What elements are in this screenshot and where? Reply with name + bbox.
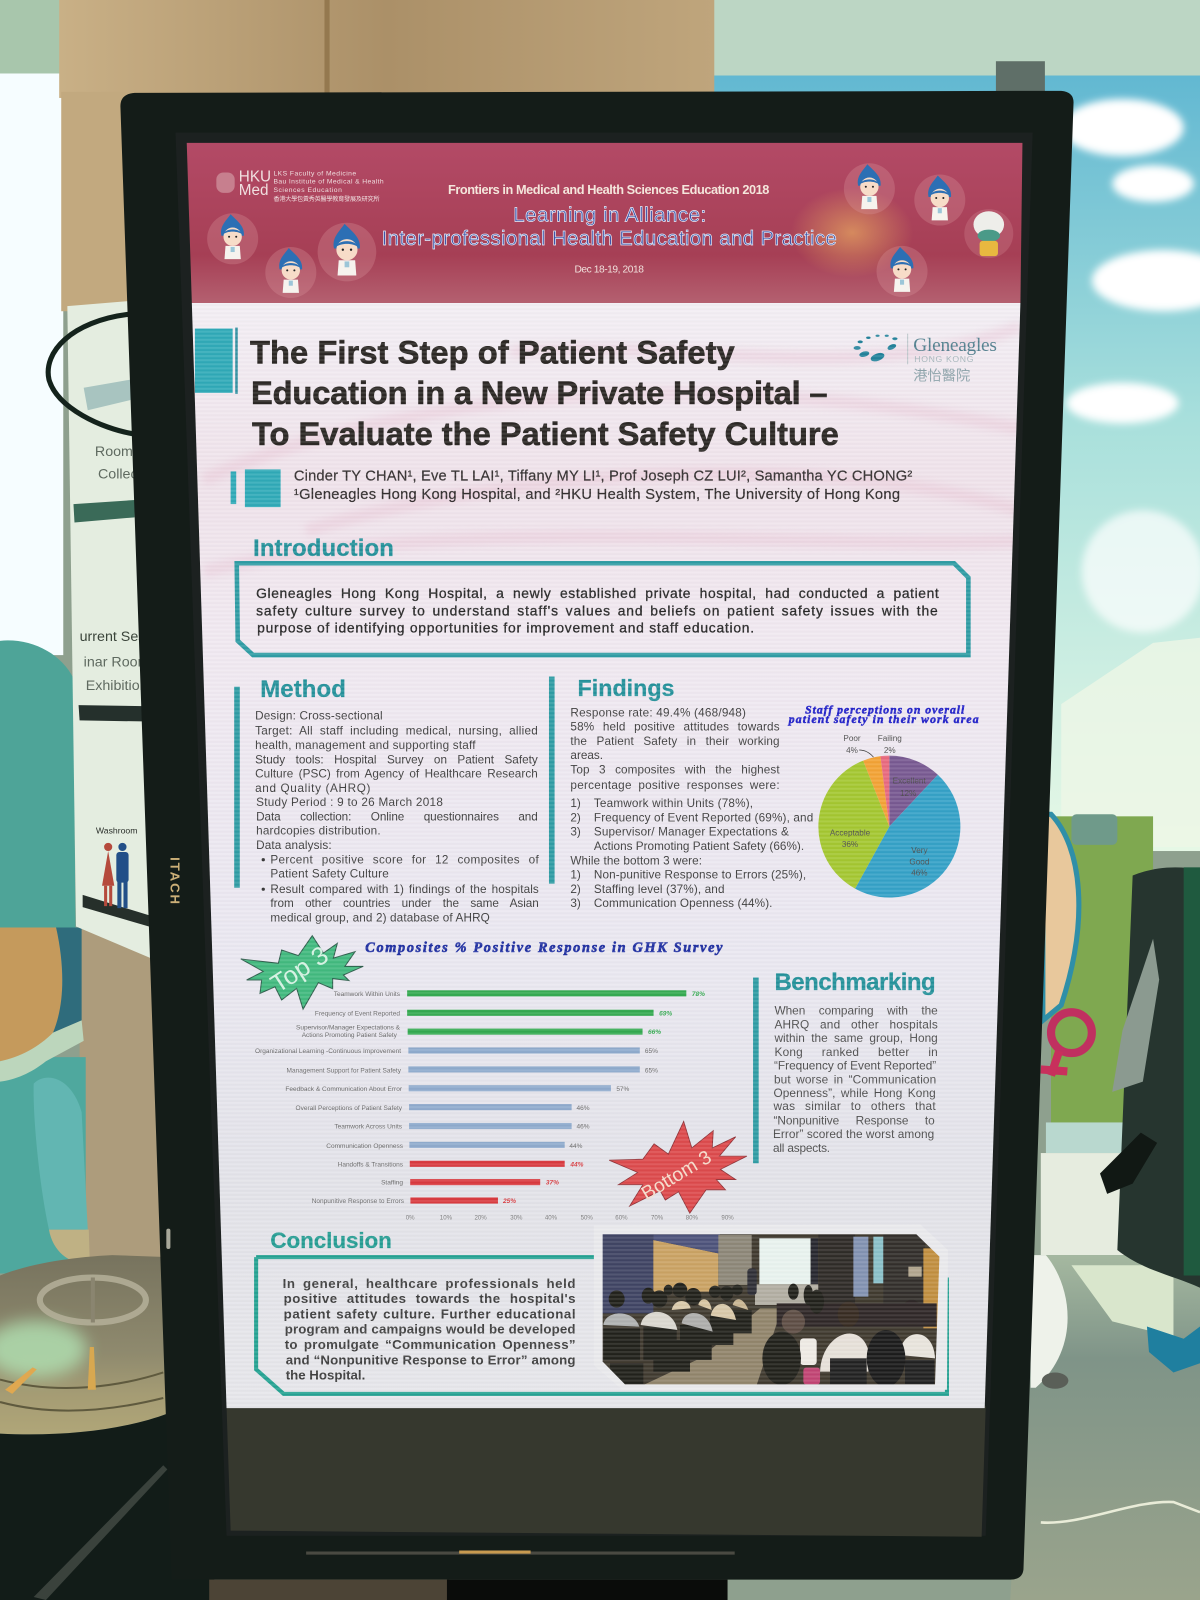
cable — [1041, 1502, 1200, 1523]
method text: Percent positive score for 12 composites of — [270, 853, 540, 866]
findings text: 3) — [570, 826, 581, 839]
left mascot dark band — [53, 928, 82, 1033]
HKU Med logo: 香港大學包黃秀英醫學教育發展及研究所 — [273, 195, 380, 203]
sign strip dark one — [73, 500, 135, 522]
value labels: 66% — [648, 1029, 661, 1036]
bars middle — [408, 1047, 640, 1148]
conference name: Frontiers in Medical and Health Sciences Education 2018 — [448, 182, 769, 197]
white round base — [1031, 1255, 1068, 1388]
curtains — [653, 1240, 718, 1292]
slice: Failing 2% — [880, 756, 889, 827]
pie chart: staff perceptions — [788, 703, 979, 898]
callout: Top 3 — [241, 936, 363, 1009]
pie labels: Failing — [878, 734, 902, 743]
pie labels: 4% — [846, 746, 858, 755]
findings text: 3) — [570, 897, 581, 910]
screen texture — [192, 303, 1020, 1408]
method text: Target: All staff including medical, nursing, allied — [255, 725, 538, 738]
benchmarking text: Kong ranked better in — [774, 1045, 938, 1059]
pie labels: Very — [911, 846, 928, 855]
bars top 3 — [407, 990, 686, 1035]
panel: introduction: purpose of identifying opportunities for improvement and staff education. — [257, 620, 754, 636]
header banner — [187, 143, 1022, 303]
category labels: Staffing — [381, 1180, 403, 1187]
pie labels: 12% — [900, 789, 916, 798]
category labels: Organizational Learning -Continuous Improvement — [255, 1048, 401, 1055]
method text: Result compared with 1) findings of the hospitals — [270, 883, 539, 896]
benchmarking text: Openness”, while Hong Kong — [773, 1086, 936, 1100]
presenter — [747, 1268, 757, 1295]
sign text fragments: Exhibition Area — [86, 678, 181, 694]
method text: Study tools: Hospital Survey on Patient Safety — [255, 753, 538, 766]
panel: findings — [549, 675, 813, 910]
findings text: percentage positive responses were: — [570, 779, 780, 792]
category labels: Teamwork Within Units — [334, 991, 401, 998]
pillar lower — [80, 918, 171, 1265]
x axis: 20% — [474, 1214, 487, 1221]
bar chart title: Composites % Positive Response in GHK Survey — [365, 940, 723, 956]
banner glow — [791, 188, 913, 278]
callout: Bottom 3 — [609, 1121, 747, 1213]
panel: conclusion: program and campaigns would be developed — [285, 1322, 576, 1337]
poster pink waves — [204, 327, 1020, 571]
icon: female and male washroom figures — [102, 843, 129, 908]
callout: Top 3: Top 3 — [266, 941, 334, 999]
benchmarking text: “Nonpunitive Response to — [773, 1113, 935, 1127]
sign strip dark two — [79, 705, 143, 721]
HKU Med logo: HKU — [239, 169, 271, 186]
value labels: 44% — [569, 1161, 584, 1168]
poster title: The First Step of Patient Safety — [250, 333, 735, 370]
findings text: Frequency of Event Reported (69%), and — [594, 811, 813, 824]
x axis: 10% — [440, 1214, 453, 1221]
panel: conclusion: positive attitudes towards the hospital's — [284, 1291, 576, 1306]
sign text fragments — [80, 444, 181, 836]
category labels: Supervisor/Manager Expectations & — [296, 1025, 401, 1032]
x axis: 80% — [686, 1214, 699, 1221]
author accent blocks — [231, 469, 281, 507]
pie labels — [830, 734, 930, 878]
panel: conclusion: and “Nonpunitive Response to Error” among — [286, 1352, 576, 1367]
left mascot face — [0, 928, 62, 1061]
distant building — [1061, 638, 1200, 847]
pie labels: Poor — [843, 734, 861, 743]
findings text: While the bottom 3 were: — [570, 854, 702, 867]
dark floor left — [0, 1413, 214, 1600]
panel: conclusion: the Hospital. — [286, 1368, 365, 1383]
left teal mascot head — [0, 640, 76, 931]
pie chart title — [788, 703, 979, 726]
panel: conclusion: patient safety culture. Further educational — [284, 1306, 576, 1321]
photo: seminar audience — [594, 1224, 948, 1390]
category labels: Actions Promoting Patient Safety — [302, 1032, 398, 1039]
sign text fragments: Room S-7 — [95, 444, 159, 460]
benchmarking text — [772, 1003, 938, 1155]
conference theme: Learning in Alliance: — [513, 204, 706, 226]
slice: Excellent 12% — [889, 756, 938, 827]
benchmarking text: but worse in “Communication — [774, 1073, 936, 1087]
x axis: 40% — [545, 1214, 558, 1221]
value labels: 78% — [692, 991, 705, 998]
category labels: Handoffs & Transitions — [338, 1161, 404, 1168]
upper wall left — [0, 0, 61, 73]
benchmarking text: all aspects. — [773, 1141, 830, 1155]
x axis: 0% — [406, 1214, 415, 1221]
clouds — [1061, 99, 1200, 633]
x axis: 70% — [651, 1214, 664, 1221]
x axis: 50% — [581, 1214, 593, 1221]
panel: conclusion: to promulgate “Communication Openness” — [285, 1337, 576, 1352]
stand — [209, 1580, 449, 1600]
HKU Med logo: Med — [239, 182, 269, 199]
method text: hardcopies distribution. — [256, 825, 381, 838]
floor right — [1010, 1255, 1200, 1600]
authors and affiliations: ¹Gleneagles Hong Kong Hospital, and ²HKU Health System, The University of Hong Kong — [294, 487, 900, 503]
category labels: Management Support for Patient Safety — [287, 1067, 402, 1074]
female symbol — [1051, 1012, 1092, 1053]
value labels: 44% — [569, 1143, 583, 1150]
mascot in helmet — [964, 209, 1013, 258]
value labels: 37% — [546, 1180, 559, 1187]
panel: conclusion — [256, 1257, 947, 1394]
mascots right — [844, 163, 895, 214]
control buttons — [166, 1229, 170, 1249]
right mascot — [1043, 814, 1079, 1020]
value labels — [502, 991, 705, 1205]
heading: Benchmarking: Benchmarking — [774, 969, 936, 996]
bottom edge highlight — [306, 1552, 735, 1555]
findings text: 2) — [570, 811, 581, 824]
heading: Introduction: Introduction — [253, 535, 394, 562]
sign text fragments: Collection A — [98, 467, 174, 483]
HKU Med logo: LKS Faculty of Medicine — [273, 171, 356, 178]
left mascot pale band — [0, 1020, 84, 1082]
value labels: 25% — [502, 1198, 516, 1205]
column — [718, 1235, 752, 1285]
left mascot body — [0, 1057, 86, 1273]
inner bezel — [176, 133, 1033, 1536]
pie chart title: Staff perceptions on overall — [805, 703, 965, 716]
panel: introduction — [237, 563, 968, 655]
method text: Patient Safety Culture — [270, 868, 389, 881]
conference theme — [382, 204, 837, 250]
lower dark panel — [227, 1406, 986, 1537]
poster title — [250, 333, 839, 452]
value labels: 65% — [645, 1067, 658, 1074]
value labels: 69% — [659, 1010, 672, 1017]
blue caster — [1147, 1327, 1200, 1372]
right window sky — [712, 76, 1200, 851]
panel: conclusion: In general, healthcare professionals held — [283, 1276, 576, 1291]
pie chart title: patient safety in their work area — [788, 713, 979, 726]
poster title: To Evaluate the Patient Safety Culture — [252, 415, 839, 452]
findings text: Teamwork within Units (78%), — [594, 797, 753, 810]
right plant — [1051, 816, 1153, 1122]
benchmarking text: was similar to others that — [772, 1099, 936, 1113]
audience right — [777, 1303, 937, 1327]
x axis: 30% — [510, 1214, 523, 1221]
bars bottom 3 — [410, 1161, 565, 1204]
Gleneagles logo: HONG KONG — [914, 354, 974, 364]
value labels: 46% — [577, 1105, 590, 1112]
HKU Med logo: Sciences Education — [273, 187, 342, 194]
audience left — [603, 1283, 752, 1384]
Gleneagles logo — [854, 334, 997, 385]
findings text: 2) — [570, 883, 581, 896]
slice: Acceptable 36% — [818, 761, 889, 889]
pie labels: 2% — [884, 746, 896, 755]
metal bin — [0, 1255, 168, 1434]
poster screen — [187, 143, 1022, 1408]
sign text fragments: urrent Session — [80, 629, 172, 645]
findings text: Actions Promoting Patient Safety (66%). — [594, 840, 804, 853]
pie labels: Acceptable — [830, 829, 871, 838]
panel: introduction: safety culture survey to understand staff's values and beliefs on patient safety issues with the — [256, 602, 938, 618]
value labels: 46% — [577, 1124, 590, 1131]
category labels: Teamwork Across Units — [334, 1124, 403, 1131]
floor — [643, 1308, 782, 1385]
conference date: Dec 18-19, 2018 — [574, 264, 644, 275]
monitor frame — [120, 91, 1074, 1600]
method text: Data collection: Online questionnaires and — [256, 810, 538, 823]
findings text: Top 3 composites with the highest — [570, 763, 780, 776]
benchmarking text: When comparing with the — [774, 1003, 938, 1017]
value labels: 57% — [616, 1086, 630, 1093]
sign strip dark three — [83, 895, 149, 927]
pillar upper — [59, 0, 714, 98]
method text: medical group, and 2) database of AHRQ — [270, 911, 490, 924]
findings text — [570, 706, 813, 910]
Gleneagles logo: 港怡醫院 — [913, 368, 970, 385]
left wall signs — [48, 301, 181, 959]
findings text: Supervisor/ Manager Expectations & — [594, 826, 789, 839]
findings text: Staffing level (37%), and — [594, 883, 724, 896]
icon: dot ring — [854, 335, 898, 363]
title accent blocks — [195, 328, 238, 394]
right wall — [818, 1234, 855, 1306]
upper wall right — [712, 0, 1200, 76]
category labels: Frequency of Event Reported — [315, 1010, 400, 1017]
wall under screen — [755, 1284, 818, 1305]
upper sign shadow band — [84, 380, 131, 410]
left window — [0, 73, 63, 655]
pie labels: 36% — [842, 840, 858, 849]
poster title: Education in a New Private Hospital – — [251, 374, 828, 411]
Gleneagles logo: Gleneagles — [913, 335, 997, 356]
findings text: the Patient Safety in their working — [570, 735, 780, 748]
sill and wall — [1046, 1122, 1138, 1153]
method text: and Quality (AHRQ) — [255, 782, 371, 795]
conference theme: Inter-professional Health Education and Practice — [382, 228, 837, 250]
method text: health, management and supporting staff — [255, 739, 476, 752]
slice: Very Good 46% — [855, 775, 960, 898]
findings text: Response rate: 49.4% (468/948) — [570, 706, 746, 719]
brand: ITACH: ITACH — [167, 857, 182, 904]
category labels: Communication Openness — [326, 1143, 404, 1150]
findings text: Communication Openness (44%). — [594, 897, 772, 910]
findings text: areas. — [570, 749, 603, 762]
x axis: 60% — [615, 1214, 628, 1221]
cable loop — [48, 314, 133, 434]
value labels: 65% — [645, 1048, 658, 1055]
method text: Study Period : 9 to 26 March 2018 — [256, 796, 443, 809]
benchmarking text: within the same group, Hong — [773, 1031, 938, 1045]
findings text: 1) — [570, 797, 581, 810]
pie labels: Good — [909, 857, 930, 866]
authors and affiliations: Cinder TY CHAN¹, Eve TL LAI¹, Tiffany MY LI¹, Prof Joseph CZ LUI², Samantha YC CHONG² — [294, 469, 912, 485]
category labels: Overall Perceptions of Patient Safety — [296, 1105, 403, 1112]
benchmarking text: Error” scored the worst among — [773, 1127, 934, 1141]
category labels: Nonpunitive Response to Errors — [312, 1198, 405, 1205]
benchmarking text: “Frequency of Event Reported” — [774, 1058, 936, 1072]
x axis: 90% — [721, 1214, 734, 1221]
bar chart: composites percent positive — [255, 990, 734, 1221]
window frame — [996, 61, 1045, 92]
pie labels: Excellent — [893, 777, 926, 786]
mascots left — [207, 213, 258, 264]
HKU Med logo: Bau Institute of Medical & Health — [273, 179, 384, 186]
sign text fragments: inar Room 1-4 — [84, 654, 174, 670]
panel: introduction: Gleneagles Hong Kong Hospital, a newly established private hospital, had conducted a patient — [256, 585, 939, 601]
panel: benchmarking — [753, 969, 938, 1163]
method text: Data analysis: — [256, 839, 332, 852]
heading: Findings: Findings — [578, 675, 674, 701]
wall — [600, 1233, 653, 1313]
poster body background — [192, 303, 1020, 1408]
heading: Conclusion: Conclusion — [270, 1228, 392, 1253]
method text: from other countries under the same Asian — [270, 897, 539, 910]
slice: Poor 4% — [863, 756, 889, 827]
findings text: 1) — [570, 869, 581, 882]
method text: Culture (PSC) from Agency of Healthcare Research — [255, 768, 538, 781]
category labels: Feedback & Communication About Error — [285, 1086, 403, 1093]
findings text: 58% held positive attitudes towards — [570, 721, 780, 734]
suitcase — [1117, 867, 1200, 1288]
sign text fragments: Washroom — [96, 826, 137, 836]
category labels — [255, 991, 405, 1205]
callout: Bottom 3: Bottom 3 — [638, 1146, 715, 1205]
authors and affiliations — [294, 469, 912, 503]
findings text: Non-punitive Response to Errors (25%), — [594, 869, 806, 882]
projection screen — [759, 1238, 811, 1284]
method text: Design: Cross-sectional — [255, 709, 383, 722]
pie labels: 46% — [911, 869, 928, 878]
heading: Method: Method — [260, 676, 346, 703]
panel: method — [234, 676, 540, 924]
method text — [255, 709, 540, 924]
x axis — [406, 1214, 734, 1221]
HKU Med logo — [216, 169, 384, 203]
benchmarking text: AHRQ and other hospitals — [774, 1018, 938, 1032]
